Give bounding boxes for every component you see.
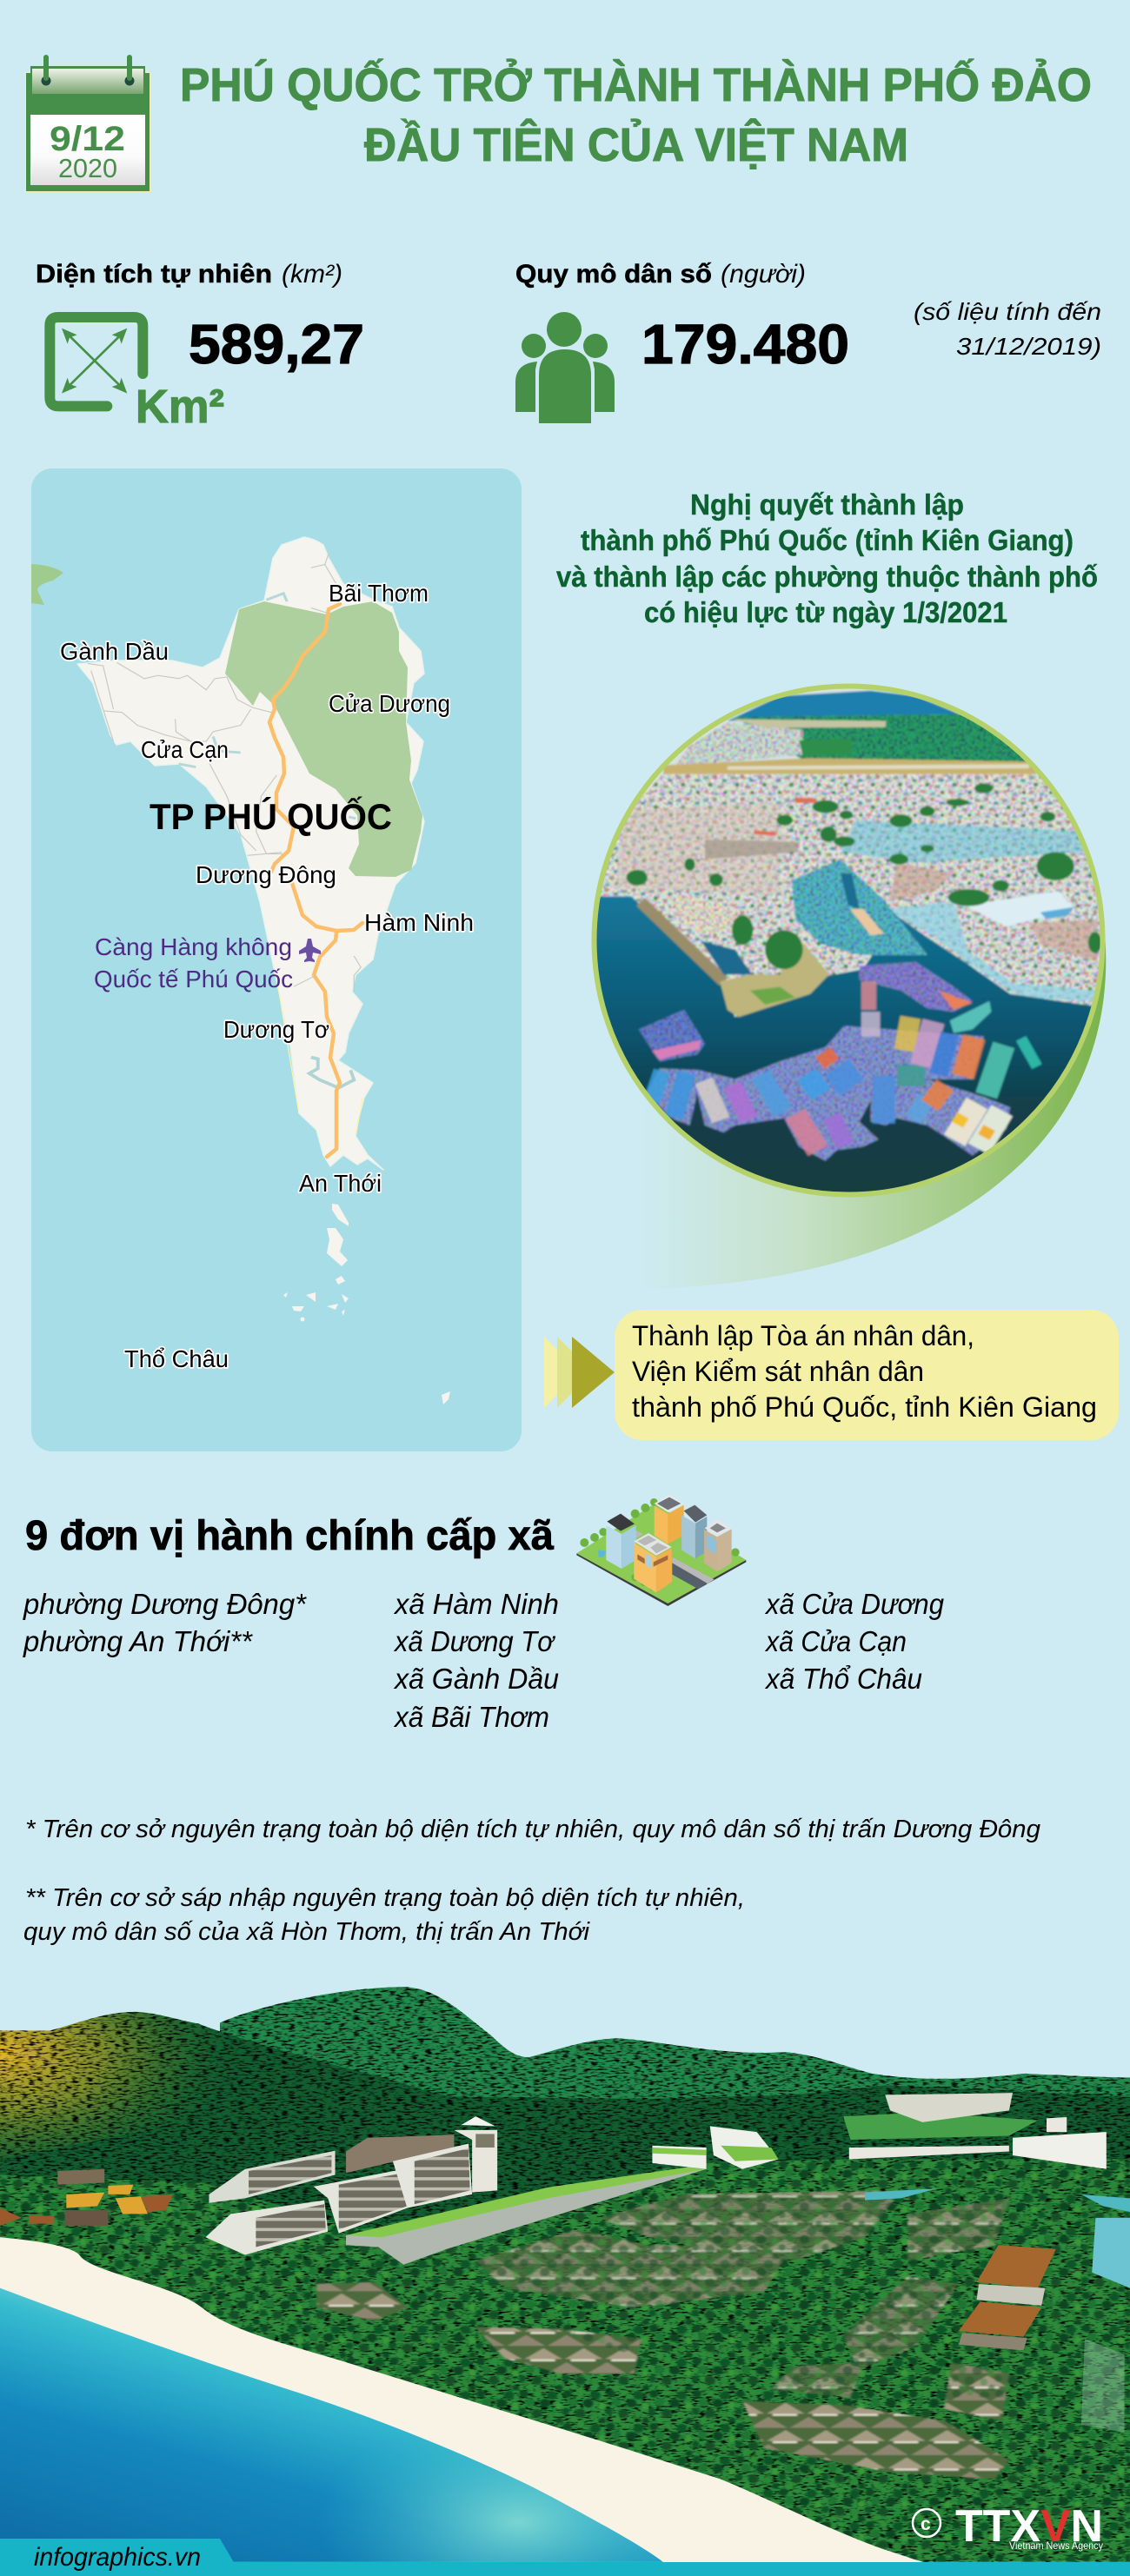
title	[180, 59, 1092, 171]
photo: harbour circle with crescent	[576, 678, 1123, 1289]
list: wards and communes: phường An Thới**	[23, 1625, 253, 1657]
resolution text	[556, 488, 1098, 628]
callout: Thành lập Tòa án nhân dân,	[632, 1320, 974, 1351]
icon: calendar 9/12/2020	[25, 55, 150, 192]
minor roads and rivers	[88, 554, 356, 855]
map place names: Cửa Cạn	[141, 736, 229, 763]
stat: population: (người)	[721, 260, 806, 289]
logo: TTXVN: Vietnam News Agency	[1009, 2539, 1103, 2552]
footnotes	[23, 1816, 1040, 1946]
airport label	[94, 933, 321, 993]
map place names: An Thới	[299, 1170, 382, 1197]
map place names	[60, 580, 474, 1372]
footnotes: quy mô dân số của xã Hòn Thơm, thị trấn An Thới	[23, 1918, 591, 1946]
data note	[914, 298, 1101, 360]
map place names: Dương Đông	[196, 861, 336, 888]
list: wards and communes: xã Cửa Dương	[764, 1588, 945, 1620]
data note: (số liệu tính đến	[914, 298, 1101, 325]
stat: population	[515, 260, 849, 423]
main road	[269, 604, 362, 1157]
map place names: Hàm Ninh	[364, 909, 474, 936]
data note: 31/12/2019)	[956, 333, 1101, 360]
brown roofs	[977, 2245, 1056, 2288]
lagoon right	[1092, 2218, 1130, 2288]
icon: calendar 9/12/2020: 2020	[58, 153, 117, 183]
bottom strip	[0, 2562, 1130, 2576]
map place names: Cửa Dương	[329, 690, 450, 717]
icon: people group	[515, 312, 615, 423]
town texture	[595, 774, 1105, 1008]
map place names: Dương Tơ	[223, 1016, 329, 1043]
stat: natural area: (km²)	[282, 260, 342, 289]
list: wards and communes: xã Thổ Châu	[764, 1663, 922, 1695]
resolution text: và thành lập các phường thuộc thành phố	[556, 561, 1098, 593]
map place names: Gành Dầu	[60, 638, 169, 665]
list: wards and communes: xã Cửa Cạn	[764, 1625, 907, 1657]
stat: natural area: 589,27	[189, 313, 364, 375]
trees	[627, 783, 1102, 969]
logo: TTXVN: TTXVN	[955, 2501, 1103, 2552]
callout: thành phố Phú Quốc, tỉnh Kiên Giang	[632, 1391, 1097, 1423]
map place names: Bãi Thơm	[329, 580, 429, 607]
list: wards and communes: xã Gành Dầu	[393, 1663, 559, 1695]
footnotes: * Trên cơ sở nguyên trạng toàn bộ diện tích tự nhiên, quy mô dân số thị trấn Dương Đông	[25, 1816, 1040, 1843]
small islands	[283, 1204, 450, 1404]
icon: calendar 9/12/2020: 9/12	[50, 120, 125, 158]
fishing boats	[647, 1026, 1010, 1161]
map city label: TP PHÚ QUỐC	[150, 795, 392, 837]
resolution text: có hiệu lực từ ngày 1/3/2021	[644, 596, 1007, 628]
panel: map of Phú Quốc	[31, 468, 522, 1451]
resolution text: thành phố Phú Quốc (tỉnh Kiên Giang)	[581, 524, 1074, 556]
green forest zone	[225, 601, 422, 877]
callout: Viện Kiểm sát nhân dân	[632, 1356, 924, 1387]
stat: population: 179.480	[641, 313, 849, 375]
hotels	[0, 2093, 1125, 2433]
title: ĐẦU TIÊN CỦA VIỆT NAM	[364, 118, 908, 171]
stat: natural area: Diện tích tự nhiên	[36, 260, 272, 289]
icon: isometric city block	[576, 1495, 746, 1606]
callout	[615, 1310, 1119, 1440]
stat: population: Quy mô dân số	[515, 260, 712, 289]
list: wards and communes: xã Dương Tơ	[393, 1625, 556, 1657]
heading: administrative units: 9 đơn vị hành chính cấp xã	[25, 1513, 554, 1559]
arrows to callout	[544, 1337, 615, 1408]
icon: area frame with arrows	[50, 317, 143, 406]
list: wards and communes	[23, 1588, 945, 1733]
green island at west edge	[31, 564, 63, 605]
list: wards and communes: xã Hàm Ninh	[393, 1588, 559, 1620]
sea	[0, 2288, 663, 2562]
logo: TTXVN: c	[921, 2514, 931, 2534]
resolution text: Nghị quyết thành lập	[690, 488, 964, 521]
map place names: Thổ Châu	[124, 1345, 229, 1372]
footnotes: ** Trên cơ sở sáp nhập nguyên trạng toàn bộ diện tích tự nhiên,	[25, 1884, 745, 1912]
vegetation	[0, 1987, 1130, 2562]
stat: natural area: Km²	[136, 381, 224, 433]
stat: natural area	[36, 260, 364, 433]
airport label: Quốc tế Phú Quốc	[94, 966, 293, 993]
list: wards and communes: phường Dương Đông*	[23, 1588, 307, 1620]
jetty and islet	[641, 902, 724, 981]
airport label: Càng Hàng không	[95, 933, 292, 960]
source tab	[0, 2539, 235, 2572]
source tab: infographics.vn	[34, 2543, 201, 2572]
ground foliage and villa clusters	[0, 2159, 1130, 2562]
water	[596, 895, 1092, 1192]
title: PHÚ QUỐC TRỞ THÀNH THÀNH PHỐ ĐẢO	[180, 59, 1092, 111]
photo: resort and beach landscape	[0, 1987, 1130, 2576]
green crescent	[625, 869, 1106, 1289]
list: wards and communes: xã Bãi Thơm	[393, 1701, 549, 1733]
island of Phú Quốc	[77, 537, 424, 1170]
sand	[0, 2237, 922, 2562]
turquoise boats mid	[792, 860, 927, 955]
